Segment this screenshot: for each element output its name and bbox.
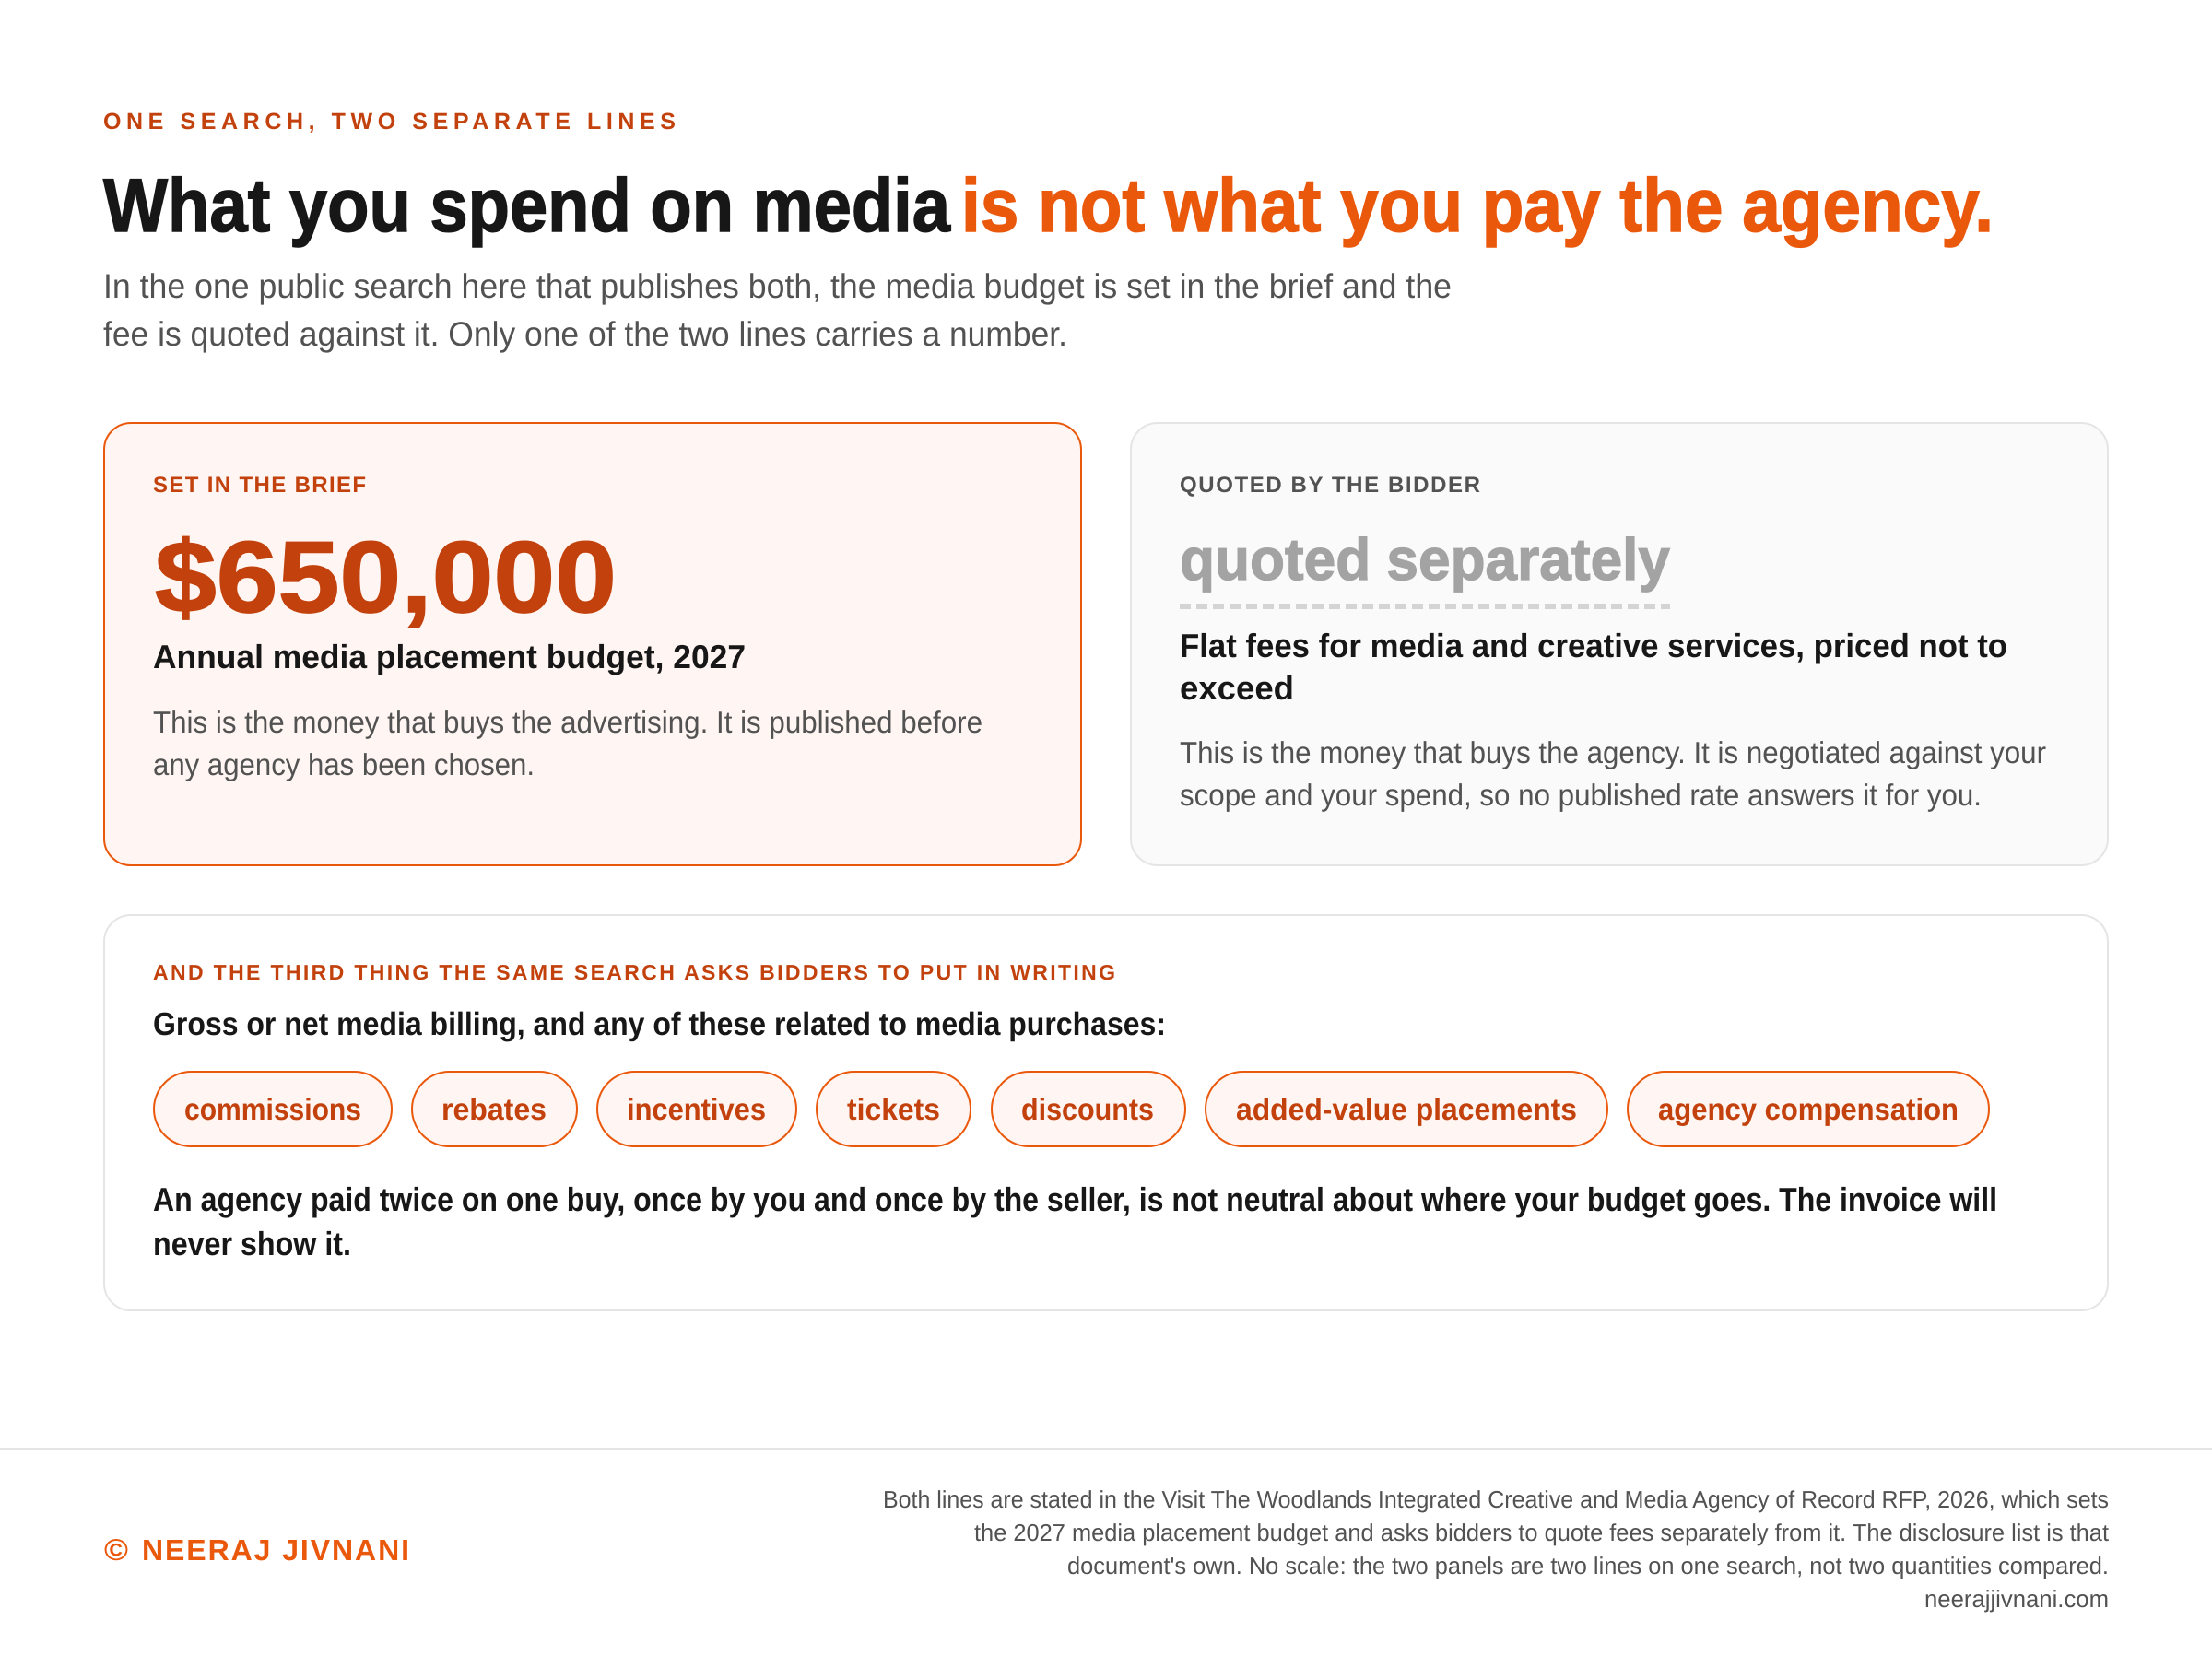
budget explanation [153,705,982,781]
pill row [154,1072,1989,1146]
footer credit: NEERAJ JIVNANI [142,1533,409,1567]
pill: discounts: discounts [1021,1092,1154,1126]
subtitle [103,267,1452,353]
pill: commissions [154,1072,392,1146]
pill: agency compensation: agency compensation [1658,1092,1959,1126]
placeholder value: quoted separately: quoted separately [1180,526,1670,593]
pill: tickets: tickets [847,1092,940,1126]
pill: commissions: commissions [184,1092,361,1126]
pill: tickets [817,1072,971,1146]
panel: quoted by the bidder [1131,423,2108,865]
fee caption: exceed [1180,669,1294,707]
pill: incentives [597,1072,796,1146]
disclosure intro: Gross or net media billing, and any of these related to media purchases: [153,1006,1166,1042]
panel label: quoted by the bidder: QUOTED BY THE BIDDER [1180,473,1480,498]
subtitle: fee is quoted against it. Only one of the two lines carries a number. [103,315,1067,353]
footer source note: document's own. No scale: the two panels are two lines on one search, not two quantities compared. [1067,1552,2109,1579]
fee caption: Flat fees for media and creative services, priced not to [1180,627,2007,664]
footer source note: neerajjivnani.com [1924,1585,2109,1613]
title [103,164,1994,248]
subtitle: In the one public search here that publishes both, the media budget is set in the brief and the [103,267,1452,305]
closing statement [153,1180,1997,1262]
fee explanation: scope and your spend, so no published rate answers it for you. [1180,778,1982,812]
closing statement: An agency paid twice on one buy, once by you and once by the seller, is not neutral about where your budget goes. The invoice will [153,1180,1997,1218]
budget explanation: This is the money that buys the advertising. It is published before [153,705,982,739]
footer source note [883,1485,2110,1613]
pill: rebates [412,1072,577,1146]
pill: incentives: incentives [627,1092,766,1126]
fee caption [1180,627,2007,707]
pill: rebates: rebates [441,1092,547,1126]
pill: discounts [992,1072,1185,1146]
budget explanation: any agency has been chosen. [153,747,535,781]
panel: set in the brief [104,423,1081,865]
title: What you spend on media [103,164,951,248]
panel label: third thing: AND THE THIRD THING THE SAME SEARCH ASKS BIDDERS TO PUT IN WRITING [153,960,1115,984]
panel: disclosure list [104,915,2108,1310]
fee explanation [1180,735,2046,812]
fee explanation: This is the money that buys the agency. It is negotiated against your [1180,735,2046,769]
big number: media budget: $650,000 [155,521,617,634]
footer source note: Both lines are stated in the Visit The Woodlands Integrated Creative and Media Agency of Record RFP, 2026, which sets [883,1485,2109,1513]
footer credit: © [104,1532,128,1567]
pill: added-value placements [1206,1072,1607,1146]
footer source note: the 2027 media placement budget and asks bidders to quote fees separately from it. The disclosure list is that [974,1519,2110,1546]
pill: added-value placements: added-value placements [1236,1092,1577,1126]
budget caption: Annual media placement budget, 2027 [153,638,746,675]
pill: agency compensation [1628,1072,1989,1146]
closing statement: never show it. [153,1225,351,1262]
eyebrow label: ONE SEARCH, TWO SEPARATE LINES [103,109,676,135]
title: is not what you pay the agency. [961,164,1994,248]
panel label: set in the brief: SET IN THE BRIEF [153,473,366,498]
